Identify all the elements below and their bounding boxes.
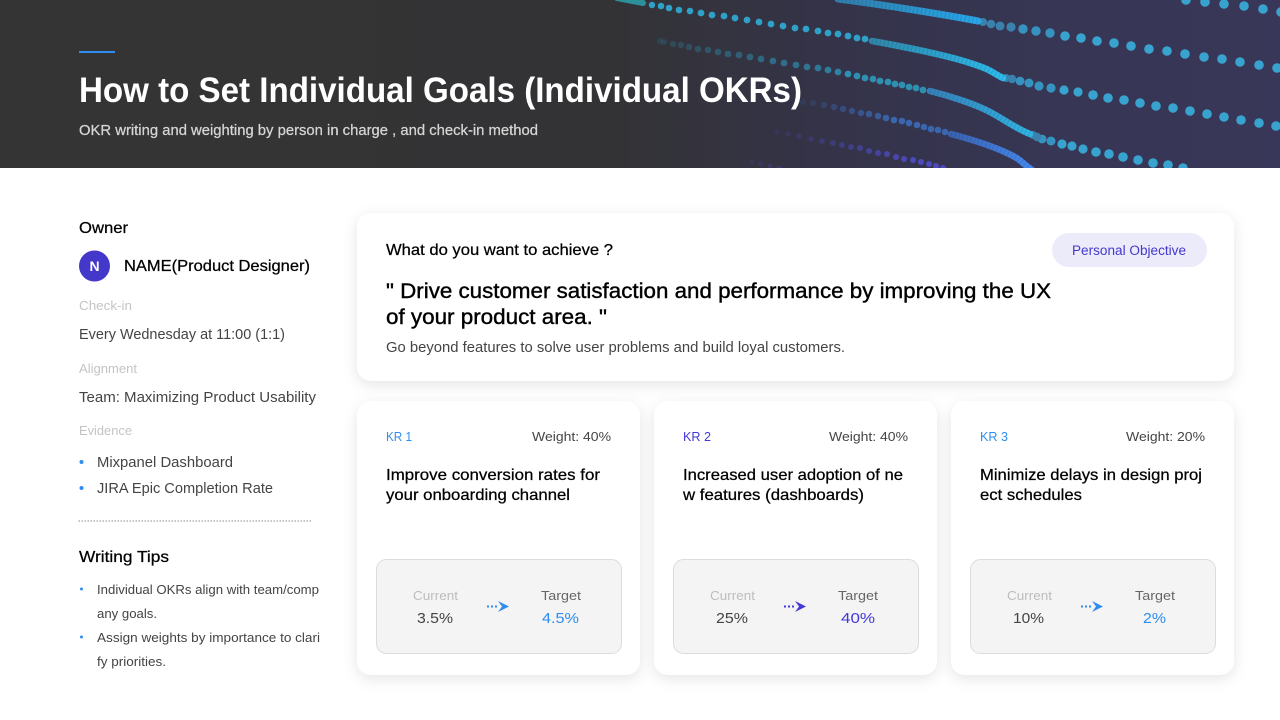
title: How to Set Individual Goals (Individual OKRs)	[79, 71, 802, 110]
KR 1 metrics box: Current	[413, 588, 458, 603]
evidence label: Evidence	[79, 423, 132, 438]
writing tips list: Assign weights by importance to clari	[97, 631, 320, 645]
KR 1 weight: Weight: 40%	[532, 429, 611, 444]
KR 3 metrics box: 10%	[1013, 610, 1044, 627]
writing tips list	[80, 583, 320, 669]
evidence list: JIRA Epic Completion Rate	[97, 480, 273, 497]
KR 1 title	[386, 467, 601, 504]
objective statement: " Drive customer satisfaction and performance by improving the UX	[386, 279, 1051, 303]
panel: KR 3	[951, 401, 1234, 675]
evidence list	[80, 454, 273, 497]
KR 3 metrics box: 2%	[1143, 610, 1166, 627]
header banner	[0, 0, 1280, 173]
arrow	[784, 601, 806, 612]
KR 2 metrics box: Current	[710, 588, 755, 603]
KR 1 label: KR 1	[386, 429, 412, 444]
KR 2 weight: Weight: 40%	[829, 429, 908, 444]
KR 1 title: Improve conversion rates for	[386, 467, 601, 484]
KR 2 metrics box: 40%	[841, 610, 875, 627]
KR 2 metrics box: 25%	[716, 610, 748, 627]
evidence list: Mixpanel Dashboard	[97, 454, 233, 471]
writing tips heading: Writing Tips	[79, 549, 169, 566]
KR 2 metrics box	[674, 560, 918, 654]
panel: personal objective	[357, 213, 1234, 381]
KR 3 metrics box	[970, 560, 1216, 654]
KR 3 metrics box: Current	[1007, 588, 1052, 603]
KR 1 metrics box: 4.5%	[542, 610, 579, 627]
bright band 1	[838, 0, 978, 21]
bright band 4	[951, 134, 1032, 170]
KR 2 metrics box: Target	[838, 588, 878, 603]
KR 1 metrics box: 3.5%	[417, 610, 453, 627]
objective statement	[386, 279, 1051, 329]
KR 1 metrics box	[376, 560, 622, 654]
KR 1 title: your onboarding channel	[386, 487, 570, 504]
check-in value: Every Wednesday at 11:00 (1:1)	[79, 326, 285, 343]
KR 2 label: KR 2	[683, 429, 711, 444]
KR 3 title	[980, 467, 1202, 504]
personal objective pill	[1052, 233, 1207, 267]
objective statement: of your product area. "	[386, 305, 607, 329]
panel: KR 2	[654, 401, 937, 675]
owner avatar	[79, 250, 110, 282]
owner avatar: N	[89, 258, 100, 274]
bright band 2	[872, 41, 1003, 78]
KR 2 title: w features (dashboards)	[682, 487, 864, 504]
bright band 3	[930, 91, 1030, 134]
KR 3 weight: Weight: 20%	[1126, 429, 1205, 444]
subtitle: OKR writing and weighting by person in charge , and check-in method	[79, 123, 538, 139]
accent line	[79, 51, 115, 53]
alignment value: Team: Maximizing Product Usability	[79, 389, 316, 406]
writing tips list: Individual OKRs align with team/comp	[97, 583, 319, 597]
check-in label: Check-in	[79, 298, 132, 313]
KR 2 title: Increased user adoption of ne	[683, 467, 903, 484]
personal objective pill: Personal Objective	[1072, 243, 1186, 258]
panel: KR 1	[357, 401, 640, 675]
arrow	[487, 601, 509, 612]
objective question: What do you want to achieve ?	[386, 242, 613, 259]
writing tips list: fy priorities.	[97, 655, 166, 669]
KR 1 metrics box: Target	[541, 588, 581, 603]
KR 3 metrics box: Target	[1135, 588, 1175, 603]
KR 3 title: Minimize delays in design proj	[980, 467, 1202, 484]
KR 2 title	[682, 467, 903, 504]
writing tips list: any goals.	[97, 607, 157, 621]
alignment label: Alignment	[79, 361, 137, 376]
KR 3 label: KR 3	[980, 429, 1008, 444]
objective description: Go beyond features to solve user problems and build loyal customers.	[386, 339, 845, 356]
arrow	[1081, 601, 1103, 612]
decorative dotted wave lines	[617, 0, 1280, 173]
owner heading: Owner	[79, 220, 129, 237]
KR 3 title: ect schedules	[980, 487, 1082, 504]
owner name: NAME(Product Designer)	[124, 258, 310, 275]
left sidebar	[78, 220, 320, 669]
